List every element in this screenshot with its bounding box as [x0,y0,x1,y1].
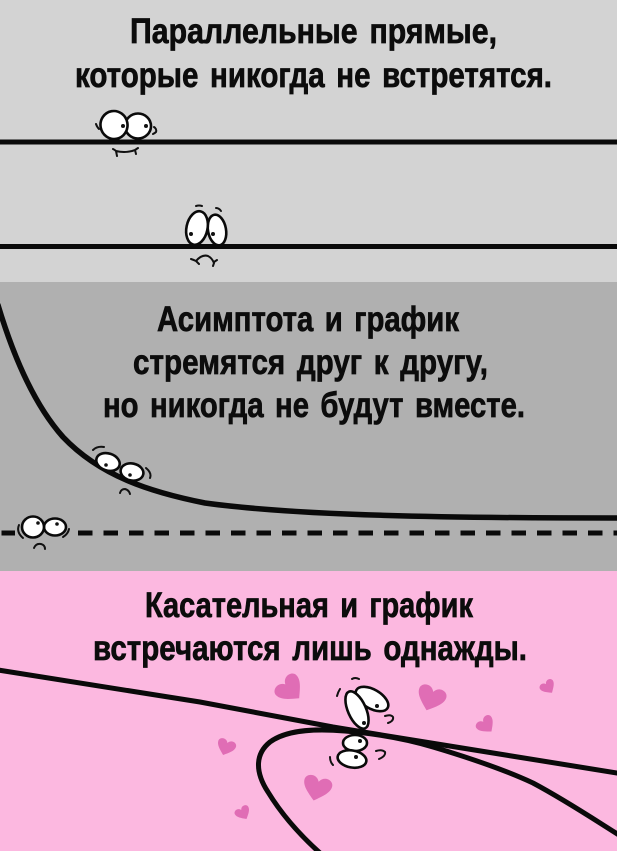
heart 1 [272,671,309,708]
upper parallel line [0,140,617,144]
character: lower tangent face [330,735,385,770]
character: upper tangent face [337,678,393,732]
heading: asymptote: Асимптота и график [157,300,459,339]
character: dashed line face [15,516,77,549]
lower parallel line [0,244,617,249]
heading: tangent: встречаются лишь однажды. [93,629,527,668]
heart 4 [538,678,558,697]
heart 5 [214,737,237,758]
hearts [214,671,558,823]
character: curve face [93,447,150,494]
character: upper line face [96,109,156,156]
heading: asymptote [103,300,525,425]
parabola curve [258,730,617,851]
dashed asymptote [0,530,617,536]
tangent line [0,670,617,773]
hyperbola curve [0,305,617,518]
character: lower line face [183,206,229,266]
heading: asymptote: стремятся друг к другу, [133,343,488,382]
panel: asymptote [0,282,617,571]
heading: tangent: Касательная и график [145,586,473,625]
heart 2 [413,682,448,715]
heading: parallel lines [75,12,552,95]
heading: asymptote: но никогда не будут вместе. [103,386,525,425]
heart 3 [474,713,499,738]
panel: parallel lines [0,0,617,282]
panel: tangent [0,571,617,851]
heart 7 [233,804,253,823]
heading: parallel lines: Параллельные прямые, [130,12,497,51]
heart 6 [300,773,334,804]
heading: tangent [93,586,527,668]
